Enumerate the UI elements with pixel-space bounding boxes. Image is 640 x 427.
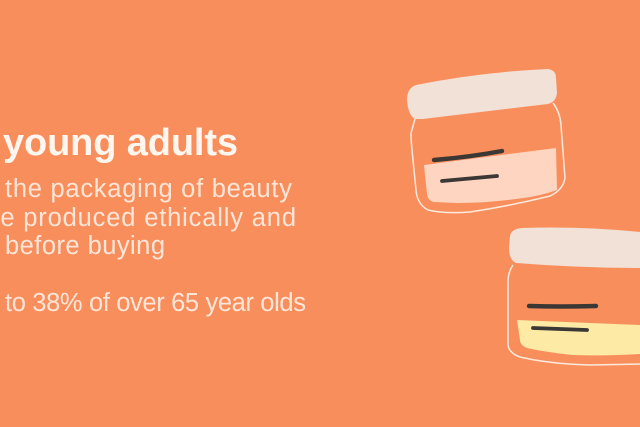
text block: comparison with over 65s: to 38% of over 65 year olds — [5, 289, 306, 317]
text block: packaging statement: the packaging of beauty — [5, 175, 292, 203]
icon: upper jar — [407, 69, 565, 213]
icon: lower jar — [508, 228, 640, 365]
heading: young adults — [3, 122, 238, 164]
text block: packaging statement: before buying — [5, 232, 165, 260]
text block: packaging statement — [0, 175, 296, 260]
